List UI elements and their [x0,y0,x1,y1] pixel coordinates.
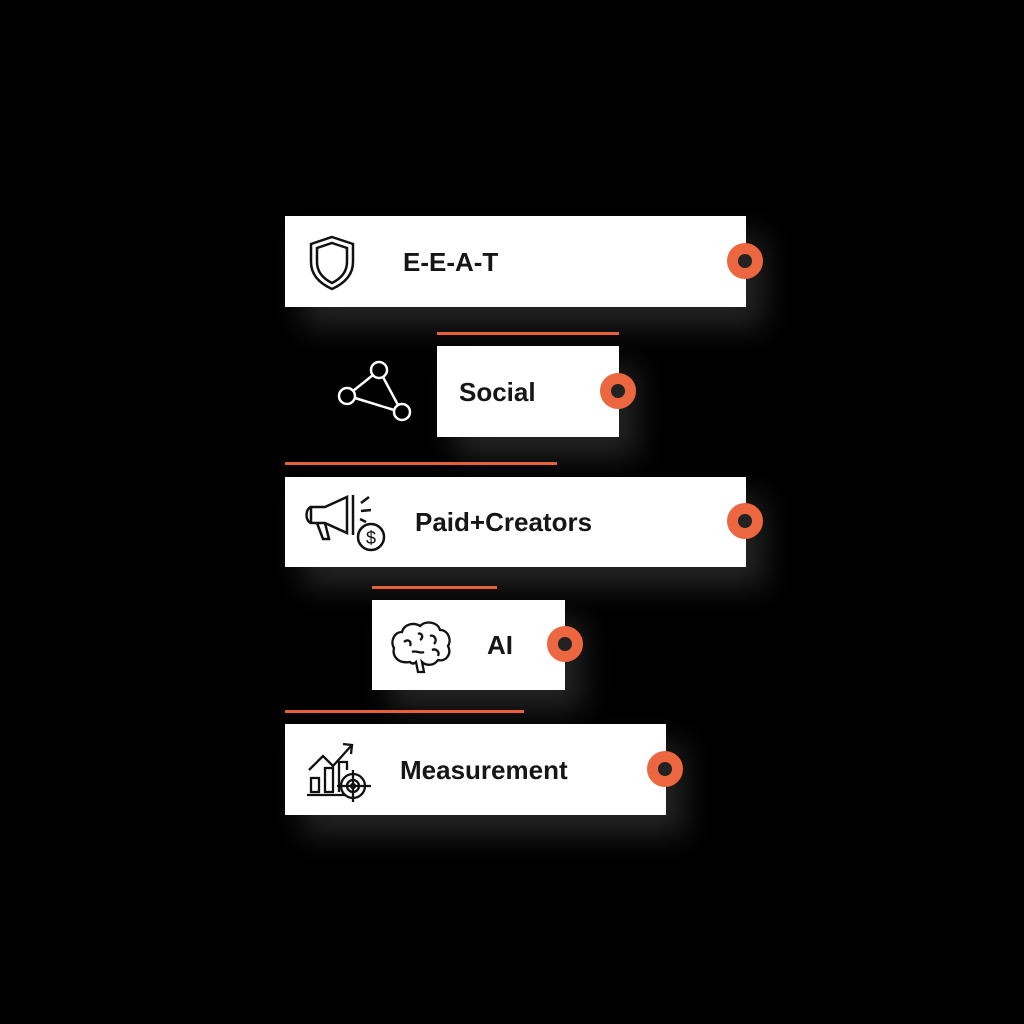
card: Social [437,346,619,437]
card: E-E-A-T [285,216,746,307]
label: Paid+Creators [415,507,592,537]
label: Social [459,377,536,407]
label: AI [487,630,513,660]
icon: chart with target [307,742,371,802]
connector dot [647,751,683,787]
card: Paid+Creators [285,477,746,567]
icon: megaphone with dollar: $ [366,528,376,548]
label: Measurement [400,755,568,785]
card: AI [372,600,565,690]
card: Measurement [285,724,666,815]
label: E-E-A-T [403,247,498,277]
icon: brain [391,621,451,674]
connector dot [727,243,763,279]
icon: megaphone with dollar [305,495,386,552]
connector dot [727,503,763,539]
connector dot [600,373,636,409]
icon: network triangle [338,360,412,422]
connector dot [547,626,583,662]
icon: shield [310,236,354,290]
